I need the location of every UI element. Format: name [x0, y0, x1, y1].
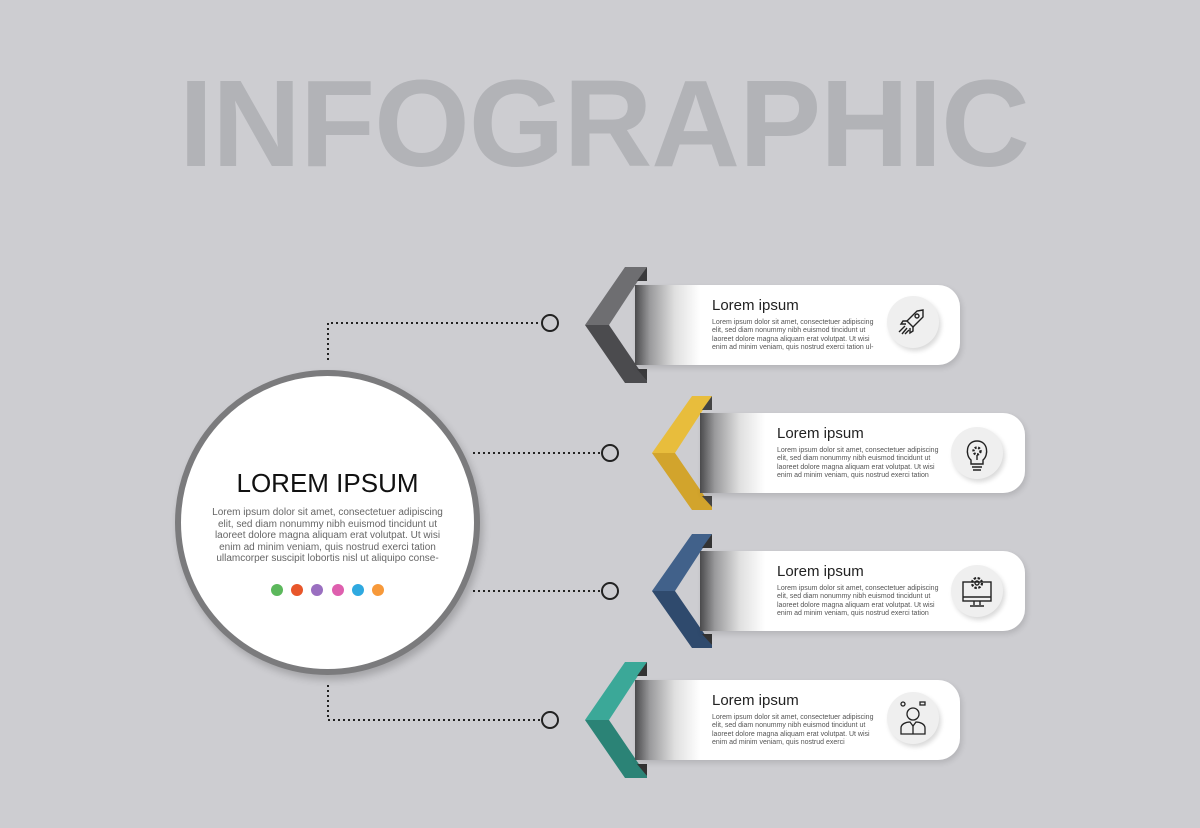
card 4: [635, 680, 960, 760]
card 1: Lorem ipsum: [712, 297, 799, 314]
connector circle 4: [542, 712, 558, 728]
connector: row 4: [328, 685, 541, 720]
icon: monitor gear: [951, 565, 1003, 617]
card 2: Lorem ipsum: [777, 425, 864, 442]
connector circle 1: [542, 315, 558, 331]
connector circle 3: [602, 583, 618, 599]
connector: row 3: [473, 590, 601, 592]
central heading: LOREM IPSUM: [236, 468, 419, 498]
card 2: [700, 413, 1025, 493]
icon: person: [887, 692, 939, 744]
chevron: blue: [652, 534, 712, 648]
card 2: Lorem ipsum dolor sit amet, consectetuer adipiscing elit, sed diam nonummy nibh euismod tincidunt ut laoreet dolore magna aliquam erat volutpat. Ut wisi enim ad minim veniam, quis nostrud exerci tation: [777, 447, 938, 479]
card 3: Lorem ipsum dolor sit amet, consectetuer adipiscing elit, sed diam nonummy nibh euismod tincidunt ut laoreet dolore magna aliquam erat volutpat. Ut wisi enim ad minim veniam, quis nostrud exerci tation: [777, 585, 938, 617]
card 3: [700, 551, 1025, 631]
central text: Lorem ipsum dolor sit amet, consectetuer adipiscing: [212, 507, 443, 518]
central text: [212, 507, 443, 564]
icon: rocket: [887, 296, 939, 348]
connector circle 2: [602, 445, 618, 461]
chevron: yellow: [652, 396, 712, 510]
card 4: Lorem ipsum dolor sit amet, consectetuer adipiscing elit, sed diam nonummy nibh euismod tincidunt ut laoreet dolore magna aliquam erat volutpat. Ut wisi enim ad minim veniam, quis nostrud exerci: [712, 714, 873, 746]
central text: ullamcorper suscipit lobortis nisl ut aliquipo conse-: [216, 553, 439, 564]
connector: row 1: [328, 323, 541, 360]
card 1: Lorem ipsum dolor sit amet, consectetuer adipiscing elit, sed diam nonummy nibh euismod tincidunt ut laoreet dolore magna aliquam erat volutpat. Ut wisi enim ad minim veniam, quis nostrud exerci tation ul-: [712, 319, 873, 351]
connector: row 2: [473, 452, 601, 454]
chevron: gray: [585, 267, 647, 383]
card 1: [635, 285, 960, 365]
color dots: [271, 584, 384, 596]
central circle: [175, 370, 480, 675]
chevron: teal: [585, 662, 647, 778]
title: INFOGRAPHIC: [179, 56, 1029, 193]
card 3: Lorem ipsum: [777, 563, 864, 580]
icon: bulb: [951, 427, 1003, 479]
central text: enim ad minim veniam, quis nostrud exerci tation: [219, 542, 436, 553]
central text: laoreet dolore magna aliquam erat volutpat. Ut wisi: [215, 530, 440, 541]
card 4: Lorem ipsum: [712, 692, 799, 709]
central text: elit, sed diam nonummy nibh euismod tincidunt ut: [218, 519, 437, 530]
